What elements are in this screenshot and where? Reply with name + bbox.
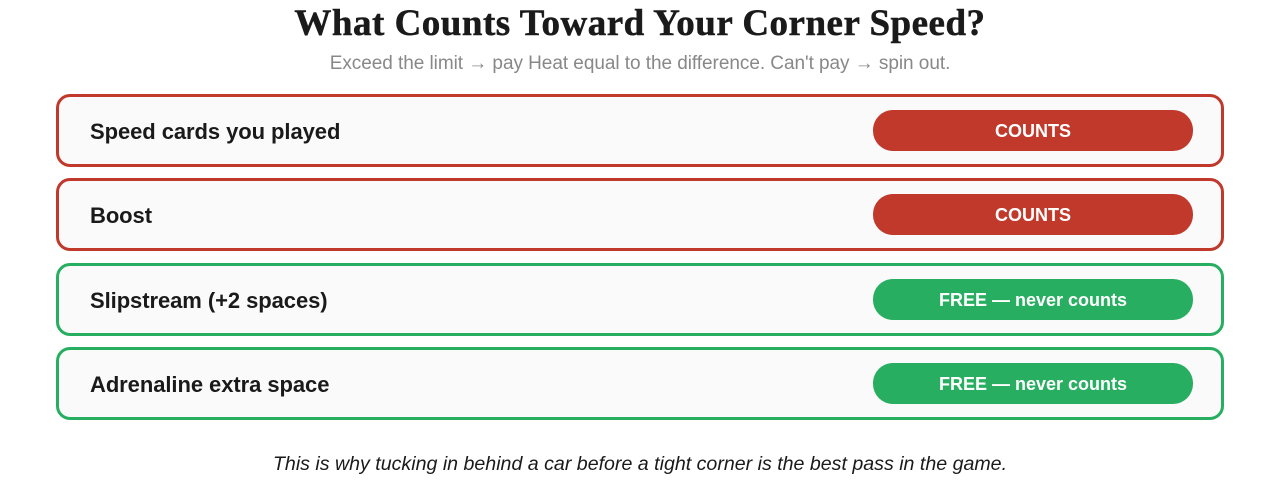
label: boost: Boost <box>90 203 152 228</box>
badge: free <box>873 363 1193 404</box>
panel: boost row <box>56 178 1224 251</box>
label: adrenaline: Adrenaline extra space <box>90 372 329 397</box>
badge: counts: COUNTS <box>995 205 1071 225</box>
badge: free: FREE — never counts <box>939 290 1127 310</box>
footnote: This is why tucking in behind a car before a tight corner is the best pass in the game. <box>273 453 1007 475</box>
panel: slipstream row <box>56 263 1224 336</box>
subtitle: Exceed the limit → pay Heat equal to the difference. Can't pay → spin out. <box>330 53 950 74</box>
panel: adrenaline row <box>56 347 1224 420</box>
panel: speed cards row <box>56 94 1224 167</box>
title: What Counts Toward Your Corner Speed? <box>294 3 986 44</box>
label: slipstream: Slipstream (+2 spaces) <box>90 288 328 313</box>
label: speed cards: Speed cards you played <box>90 119 340 144</box>
badge: free <box>873 279 1193 320</box>
badge: counts: COUNTS <box>995 121 1071 141</box>
badge: counts <box>873 194 1193 235</box>
badge: free: FREE — never counts <box>939 374 1127 394</box>
badge: counts <box>873 110 1193 151</box>
